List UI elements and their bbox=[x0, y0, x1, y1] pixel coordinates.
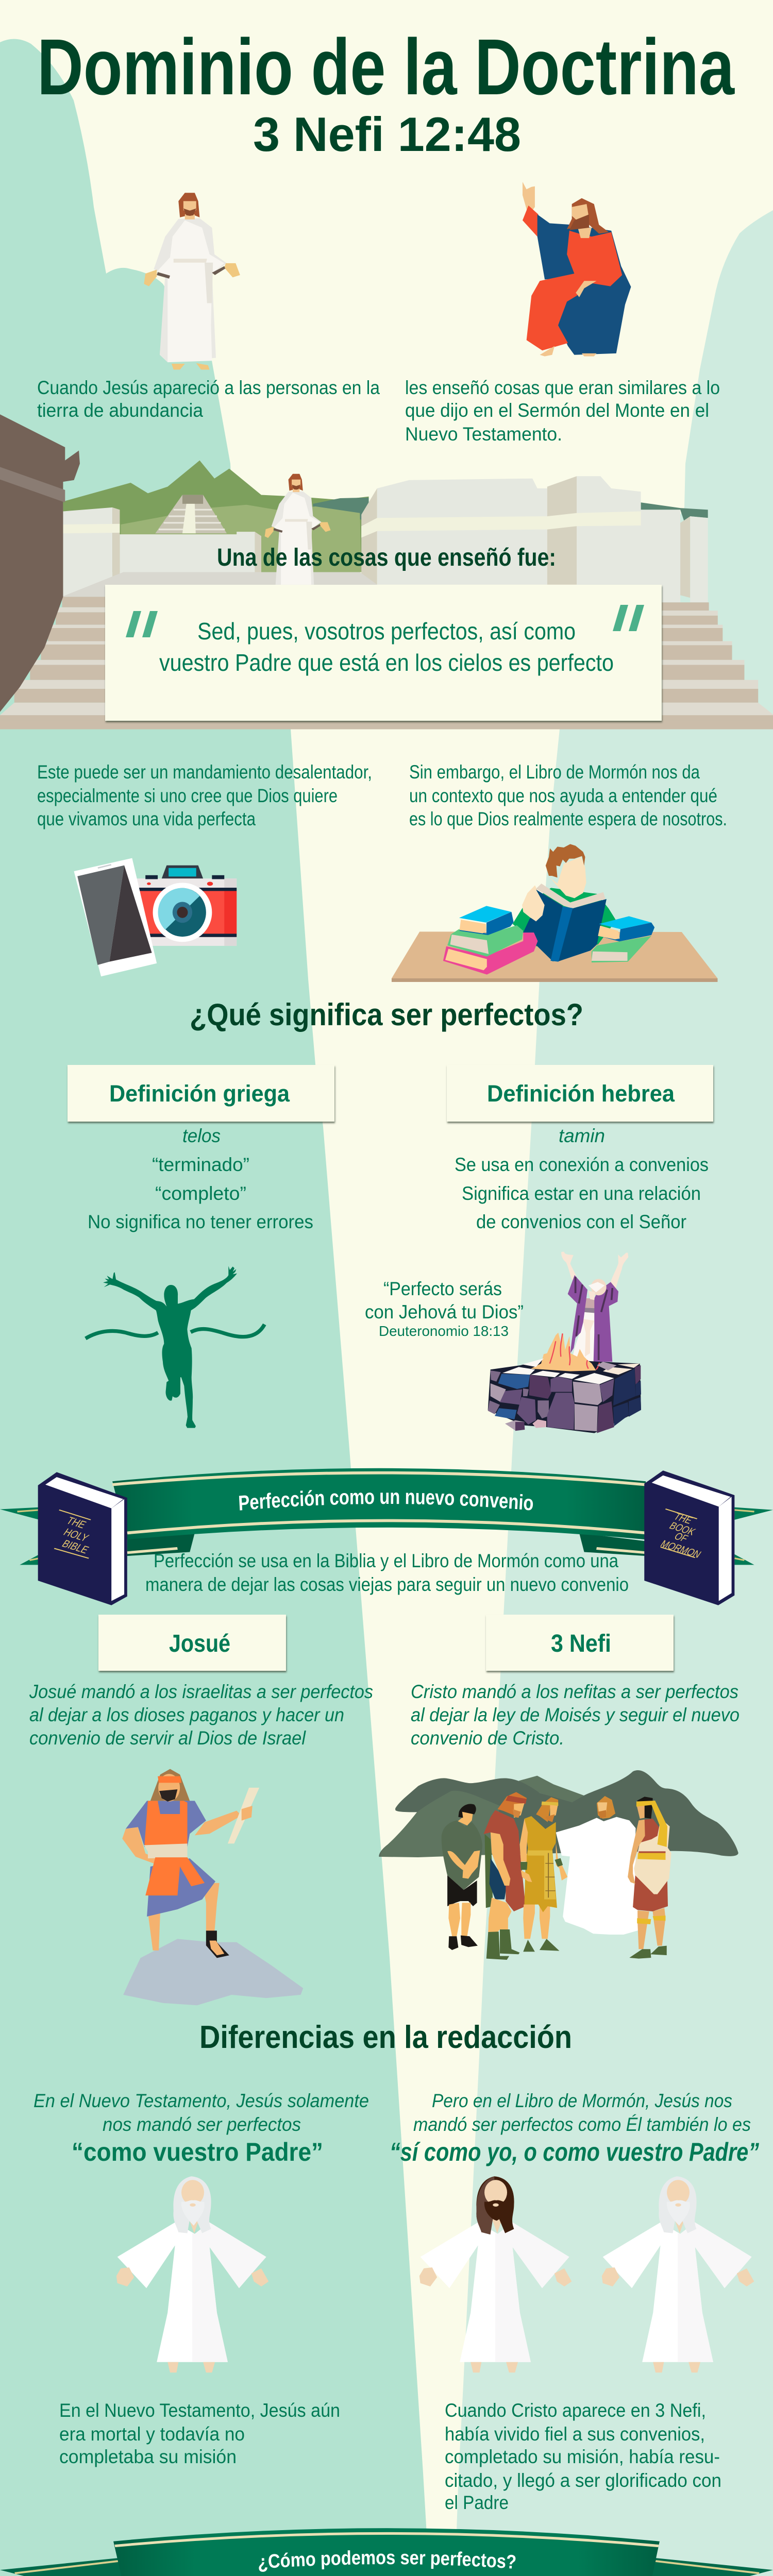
quote text: vuestro Padre que está en los cielos es perfecto bbox=[159, 649, 614, 676]
text: Deuteronomy quote bbox=[365, 1278, 524, 1339]
icon: The Book of Mormon: THE bbox=[671, 1511, 695, 1526]
heading: Diferencias en la redacción: Diferencias en la redacción bbox=[199, 2020, 572, 2055]
text: Christ commanded: Cristo mandó a los nefitas a ser perfectos bbox=[411, 1681, 738, 1702]
text: Jesus still mortal bbox=[59, 2400, 340, 2467]
illustration: Christ with Nephites and mountains bbox=[379, 1770, 738, 1960]
text: Christ commanded: al dejar la ley de Moisés y seguir el nuevo bbox=[411, 1704, 740, 1725]
figure: Jesus seated teaching bbox=[523, 182, 631, 357]
text: Hebrew meaning bbox=[455, 1125, 709, 1232]
ribbon title: Perfección como un nuevo convenio bbox=[239, 1490, 533, 1511]
text: New Testament wording: En el Nuevo Testamento, Jesús solamente bbox=[33, 2090, 369, 2111]
figure: Jesus standing bbox=[144, 193, 240, 370]
text: Jesus still mortal: era mortal y todavía no bbox=[59, 2424, 245, 2445]
figure: Heavenly Father, left bbox=[116, 2176, 268, 2372]
text: perfection in new covenant: manera de dejar las cosas viejas para seguir un nuevo convenio bbox=[145, 1574, 629, 1595]
icon: The Holy Bible book: HOLY bbox=[61, 1527, 91, 1544]
panel: Greek definition: Definición griega bbox=[109, 1080, 290, 1107]
text: Christ in 3 Nephi: citado, y llegó a ser glorificado con bbox=[445, 2470, 721, 2491]
banner: Perfección como un nuevo convenio bbox=[0, 1468, 773, 1586]
intro text right bbox=[405, 377, 720, 445]
panel: Josué bbox=[98, 1615, 286, 1671]
text: New Testament wording: nos mandó ser perfectos bbox=[103, 2114, 301, 2135]
text: Christ in 3 Nephi: el Padre bbox=[445, 2492, 509, 2513]
text: Hebrew meaning: Se usa en conexión a convenios bbox=[455, 1154, 709, 1175]
intro text right: les enseñó cosas que eran similares a lo bbox=[405, 377, 720, 398]
panel: Hebrew definition bbox=[447, 1065, 713, 1122]
icon: The Book of Mormon: OF bbox=[672, 1531, 690, 1545]
text: Book of Mormon context: un contexto que nos ayuda a entender qué bbox=[409, 785, 717, 806]
panel: Greek definition bbox=[68, 1065, 334, 1122]
intro text left: Cuando Jesús apareció a las personas en la bbox=[37, 377, 380, 398]
heading: Una de las cosas: Una de las cosas que enseñó fue: bbox=[217, 544, 556, 571]
text: Jesus still mortal: En el Nuevo Testamento, Jesús aún bbox=[59, 2400, 340, 2421]
heading: Qué significa ser perfectos: ¿Qué significa ser perfectos? bbox=[190, 997, 583, 1032]
text: Joshua commanded: al dejar a los dioses paganos y hacer un bbox=[29, 1704, 344, 1725]
illustration: camera and phone bbox=[74, 858, 237, 976]
text: Book of Mormon context: Sin embargo, el Libro de Mormón nos da bbox=[409, 761, 700, 783]
text: discouraging commandment: Este puede ser un mandamiento desalentador, bbox=[37, 761, 372, 783]
illustration: temple scene with stairs bbox=[0, 414, 773, 730]
text: perfection in new covenant: Perfección se usa en la Biblia y el Libro de Mormón como una bbox=[154, 1550, 618, 1571]
panel: Josué: Josué bbox=[169, 1630, 230, 1657]
icon: The Holy Bible book bbox=[38, 1472, 127, 1605]
text: Christ commanded bbox=[411, 1681, 740, 1749]
text: Hebrew meaning: tamin bbox=[559, 1125, 605, 1146]
icon: The Holy Bible book: BIBLE bbox=[59, 1538, 91, 1556]
quote text bbox=[159, 618, 614, 676]
intro text left: tierra de abundancia bbox=[37, 400, 203, 421]
panel: 3 Nefi bbox=[486, 1615, 674, 1671]
illustration: Joshua with scroll bbox=[122, 1769, 303, 2005]
illustration: priest at altar bbox=[488, 1251, 641, 1433]
text: Christ in 3 Nephi: había vivido fiel a sus convenios, bbox=[445, 2424, 705, 2445]
text: perfection in new covenant bbox=[145, 1550, 629, 1595]
text: Hebrew meaning: Significa estar en una relación bbox=[462, 1183, 701, 1204]
icon: closing quote mark bbox=[613, 605, 644, 631]
illustration: person reading with books bbox=[392, 844, 717, 982]
text: Greek meaning bbox=[88, 1125, 313, 1232]
subtitle: scripture reference: 3 Nefi 12:48 bbox=[253, 107, 521, 161]
text: Joshua commanded: Josué mandó a los israelitas a ser perfectos bbox=[29, 1681, 373, 1702]
text: discouraging commandment bbox=[37, 761, 372, 829]
text: Deuteronomy quote: Deuteronomio 18:13 bbox=[379, 1323, 509, 1339]
quote text: Sed, pues, vosotros perfectos, así como bbox=[197, 618, 576, 645]
text: Deuteronomy quote: “Perfecto serás bbox=[383, 1278, 502, 1299]
text: Joshua commanded: convenio de servir al Dios de Israel bbox=[29, 1727, 307, 1749]
figure: Jesus in the temple scene bbox=[265, 474, 331, 595]
text: Greek meaning: “completo” bbox=[155, 1183, 246, 1204]
intro text left bbox=[37, 377, 380, 421]
icon: The Book of Mormon: BOOK bbox=[667, 1520, 698, 1538]
ribbon title: ¿Cómo podemos ser perfectos? bbox=[259, 2550, 515, 2572]
text: Joshua commanded bbox=[29, 1681, 373, 1749]
icon: runner crossing finish line bbox=[86, 1266, 264, 1428]
text: Christ commanded: convenio de Cristo. bbox=[411, 1727, 564, 1749]
panel: 3 Nefi: 3 Nefi bbox=[551, 1630, 611, 1657]
figure: Heavenly Father, right bbox=[602, 2176, 754, 2372]
text: discouraging commandment: que vivamos una vida perfecta bbox=[37, 808, 256, 829]
intro text right: Nuevo Testamento. bbox=[405, 423, 562, 445]
text: Greek meaning: No significa no tener errores bbox=[88, 1211, 313, 1232]
text: Greek meaning: telos bbox=[182, 1125, 221, 1146]
intro text right: que dijo en el Sermón del Monte en el bbox=[405, 400, 709, 421]
text: Book of Mormon wording: mandó ser perfectos como Él también lo es bbox=[413, 2114, 751, 2135]
ribbon shape bbox=[0, 1468, 773, 1565]
icon: The Holy Bible book: THE bbox=[64, 1515, 88, 1531]
icon: The Book of Mormon: MORMON bbox=[658, 1538, 703, 1561]
icon: The Book of Mormon bbox=[644, 1470, 734, 1605]
banner: Cómo podemos ser perfectos bbox=[0, 2528, 773, 2576]
text: Christ in 3 Nephi: Cuando Cristo aparece en 3 Nefi, bbox=[445, 2400, 706, 2421]
text: Greek meaning: “terminado” bbox=[152, 1154, 249, 1175]
icon: opening quote mark bbox=[126, 611, 158, 637]
text: New Testament wording: “como vuestro Padre” bbox=[72, 2138, 323, 2166]
text: New Testament wording bbox=[33, 2090, 369, 2166]
text: Book of Mormon wording bbox=[390, 2090, 759, 2166]
panel: Hebrew definition: Definición hebrea bbox=[487, 1080, 675, 1107]
text: Hebrew meaning: de convenios con el Señor bbox=[476, 1211, 686, 1232]
text: Jesus still mortal: completaba su misión bbox=[59, 2446, 237, 2467]
text: Book of Mormon wording: Pero en el Libro de Mormón, Jesús nos bbox=[432, 2090, 732, 2111]
panel: scripture quote bbox=[105, 585, 662, 721]
text: Deuteronomy quote: con Jehová tu Dios” bbox=[365, 1301, 524, 1323]
figure: Christ, center bbox=[419, 2176, 572, 2372]
text: Christ in 3 Nephi: completado su misión, había resu- bbox=[445, 2446, 720, 2467]
text: discouraging commandment: especialmente si uno cree que Dios quiere bbox=[37, 785, 338, 806]
ribbon shape bbox=[0, 2528, 773, 2576]
text: Book of Mormon context bbox=[409, 761, 727, 829]
text: Christ in 3 Nephi bbox=[445, 2400, 721, 2513]
